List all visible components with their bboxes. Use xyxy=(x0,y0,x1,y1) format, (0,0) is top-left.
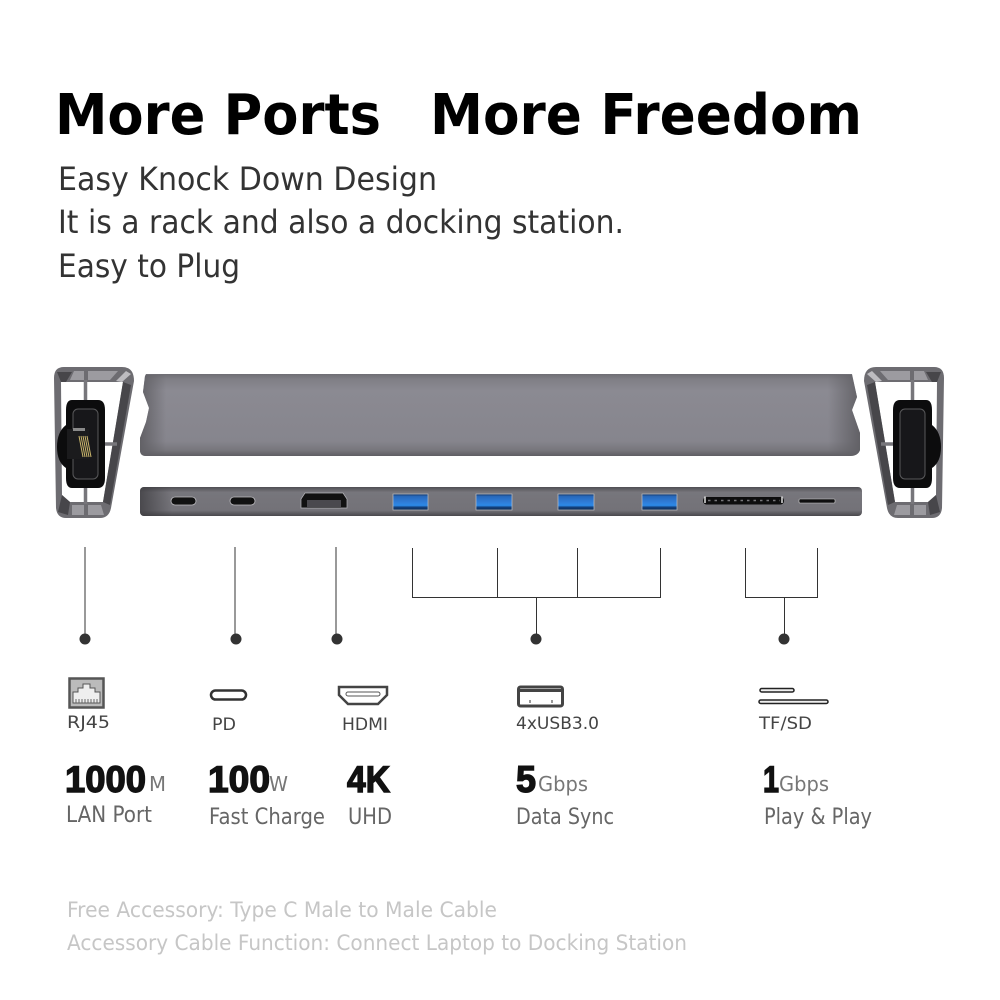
icon: RJ45 xyxy=(70,678,104,708)
label: RJ45: RJ45 xyxy=(67,713,110,733)
icon: HDMI xyxy=(339,687,387,704)
left end bracket with RJ45 port xyxy=(54,367,134,518)
icon: card slots xyxy=(759,688,828,704)
figure: 1Gbps: Gbps xyxy=(779,772,829,796)
USB 3.0 port 1 xyxy=(393,494,428,510)
description: UHD: UHD xyxy=(348,805,392,830)
figure: 1000M: M xyxy=(149,772,166,796)
label: PD: PD xyxy=(212,715,236,735)
icon: USB-C xyxy=(211,690,246,700)
SD card slot xyxy=(703,496,784,504)
USB-C port 2 xyxy=(230,497,255,505)
figure: 4K: 4K xyxy=(347,759,390,800)
subtitle text block: It is a rack and also a docking station. xyxy=(58,203,624,241)
connector: RJ45 xyxy=(80,547,90,644)
label: 4xUSB3.0: 4xUSB3.0 xyxy=(516,714,599,734)
accessory note: Accessory Cable Function: Connect Laptop to Docking Station xyxy=(67,931,687,955)
subtitle text block: Easy Knock Down Design xyxy=(58,160,437,198)
figure: 1000M: 1000 xyxy=(65,759,146,800)
subtitle text block xyxy=(58,160,624,285)
description: Play & Play: Play & Play xyxy=(764,805,872,830)
column: HDMI xyxy=(339,687,392,830)
connector: HDMI xyxy=(332,547,342,644)
label: TF/SD: TF/SD xyxy=(758,714,812,734)
top rack bar xyxy=(140,374,860,456)
TF card slot xyxy=(799,499,835,503)
connector bracket: TF/SD xyxy=(746,548,818,644)
column: TF/SD xyxy=(758,688,872,830)
column: USB xyxy=(516,687,614,830)
HDMI port xyxy=(301,493,347,508)
USB 3.0 port 2 xyxy=(476,494,512,510)
connector bracket: USB xyxy=(412,548,660,644)
description: LAN Port: LAN Port xyxy=(66,803,152,828)
description: Data Sync: Data Sync xyxy=(516,805,614,830)
accessory note: Free Accessory: Type C Male to Male Cable xyxy=(67,898,497,922)
column: RJ45 xyxy=(65,678,166,828)
figure: 100W: W xyxy=(269,772,288,796)
figure: 1Gbps: 1 xyxy=(763,759,779,800)
USB 3.0 port 4 xyxy=(642,494,677,510)
figure: 5Gbps xyxy=(516,759,588,800)
column: PD xyxy=(208,690,325,830)
figure: 100W: 100 xyxy=(208,759,270,800)
subtitle text block: Easy to Plug xyxy=(58,247,240,285)
accessory note xyxy=(67,898,687,955)
figure: 5Gbps: 5 xyxy=(516,759,536,800)
right end bracket xyxy=(864,367,944,518)
icon: USB-A xyxy=(518,687,563,706)
title xyxy=(55,83,862,148)
figure: 5Gbps: Gbps xyxy=(538,772,588,796)
docking station port bar xyxy=(140,487,862,516)
USB-C port 1 xyxy=(171,497,196,505)
description: Fast Charge: Fast Charge xyxy=(209,805,325,830)
figure: 1Gbps xyxy=(763,759,829,800)
title: More Freedom xyxy=(430,83,862,148)
label: HDMI: HDMI xyxy=(342,715,388,735)
USB 3.0 port 3 xyxy=(558,494,594,510)
connector: PD xyxy=(230,547,242,644)
title: More Ports xyxy=(55,83,381,148)
